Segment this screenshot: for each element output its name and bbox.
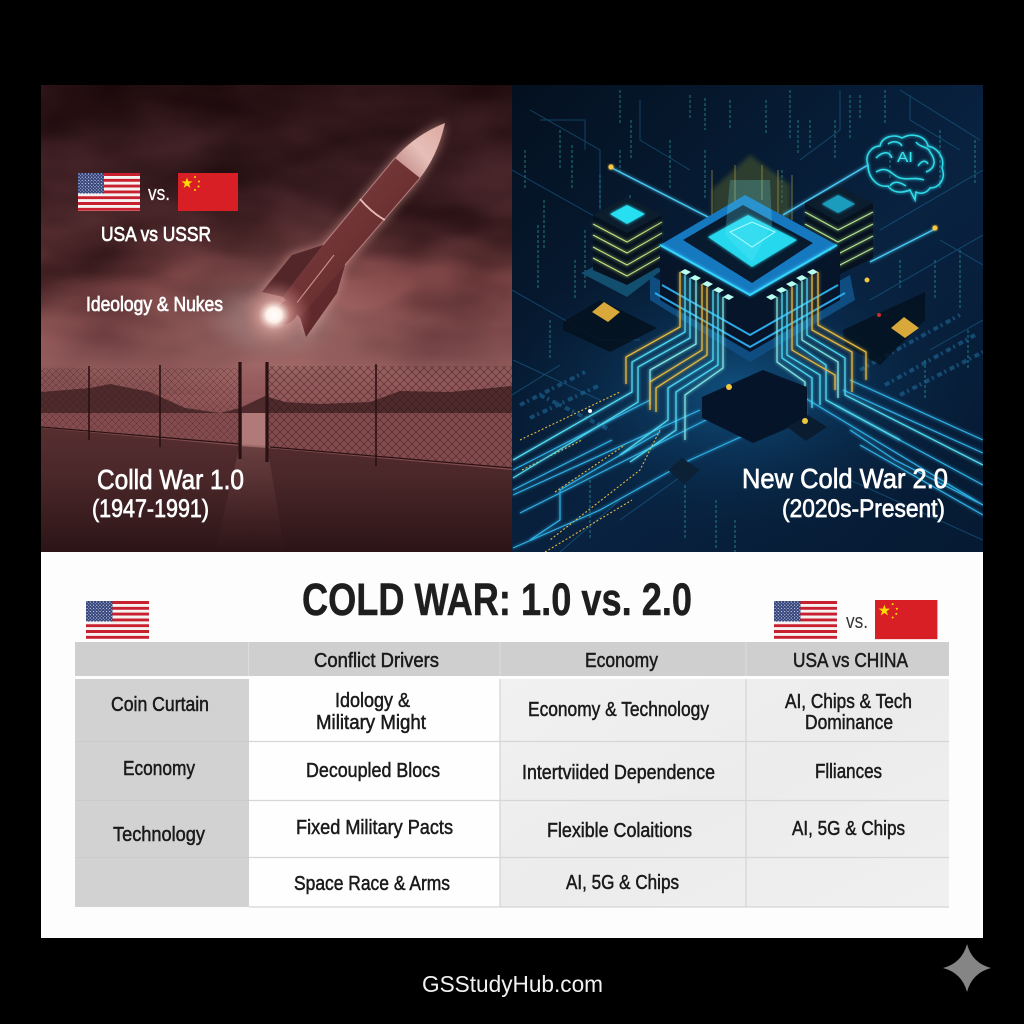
beam lines to chip — [610, 165, 935, 262]
column: USA vs China: AI, 5G & Chips — [792, 818, 905, 840]
heading: New Cold War 2.0: New Cold War 2.0 — [742, 463, 948, 494]
flag: China right — [875, 600, 937, 639]
table header — [75, 642, 949, 676]
column: USA vs China: AI, Chips & Tech — [785, 691, 912, 713]
chain link fence — [41, 362, 512, 468]
comparison table — [75, 642, 949, 907]
title: COLD WAR: 1.0 vs. 2.0 — [302, 574, 692, 625]
main diagonals — [513, 380, 983, 548]
row labels: Technology — [113, 824, 205, 846]
column: economy — [522, 699, 715, 894]
column: conflict drivers: Idology & — [335, 690, 411, 712]
dark circuit blocks — [668, 370, 827, 484]
table header: USA vs CHINA — [793, 650, 909, 672]
label: vs.: vs. — [846, 611, 868, 633]
row labels: Coin Curtain — [111, 694, 209, 716]
panel: Cold War 1.0 — [41, 85, 512, 552]
column: conflict drivers: Space Race & Arms — [294, 873, 450, 895]
gold chips — [592, 302, 919, 338]
column: conflict drivers: Decoupled Blocs — [306, 760, 440, 782]
server stack right — [805, 186, 873, 275]
flag: China — [178, 173, 238, 211]
icon: sparkle — [943, 944, 991, 992]
column: conflict drivers: Fixed Military Pacts — [296, 817, 453, 839]
gold dotted traces — [520, 392, 660, 552]
table cell backgrounds — [75, 679, 949, 907]
subheading: 1947-1991: (1947-1991) — [92, 495, 209, 523]
faint circuit lines — [512, 90, 983, 552]
column: conflict drivers: Military Might — [316, 712, 426, 734]
server stack left — [581, 197, 662, 297]
flag: USA — [78, 173, 140, 211]
table header: Economy — [585, 650, 658, 672]
circuit traces right — [777, 272, 983, 465]
row labels — [111, 694, 209, 846]
column: USA vs China: Dominance — [805, 712, 893, 734]
column: economy: AI, 5G & Chips — [566, 872, 679, 894]
distant tree line — [41, 384, 512, 414]
dark platform right — [843, 292, 925, 365]
column: USA vs China — [785, 691, 912, 840]
AI brain icon: AI — [897, 149, 913, 166]
label: USA vs USSR: USA vs USSR — [101, 224, 211, 246]
chip pins — [680, 269, 818, 300]
label: Ideology & Nukes: Ideology & Nukes — [86, 294, 223, 316]
yellow hologram — [710, 154, 792, 220]
subheading: 2020s-Present: (2020s-Present) — [782, 495, 945, 523]
central processor — [650, 180, 855, 362]
lake — [41, 413, 512, 414]
column: economy: Flexible Colaitions — [547, 820, 692, 842]
column: USA vs China: Flliances — [815, 761, 882, 783]
column: economy: Economy & Technology — [528, 699, 709, 721]
label: vs.: vs. — [148, 183, 170, 205]
table header: Conflict Drivers — [314, 650, 439, 672]
engine flame — [244, 282, 308, 343]
AI brain icon — [867, 135, 943, 200]
column: economy: Intertviided Dependence — [522, 762, 715, 784]
column: conflict drivers — [294, 690, 453, 895]
row labels: Economy — [123, 758, 195, 780]
dark platform left — [563, 300, 657, 352]
panel: New Cold War 2.0 — [495, 85, 983, 552]
panel: comparison — [41, 552, 983, 938]
circuit traces left — [513, 272, 723, 478]
circuit clutter — [520, 315, 983, 430]
heading: Cold War 1.0: Colld War 1.0 — [97, 464, 244, 495]
data rain — [525, 90, 975, 552]
footer: site name: GSStudyHub.com — [422, 971, 603, 997]
flag: USA left — [86, 601, 149, 639]
missile — [262, 123, 445, 337]
flag: USA right — [774, 601, 837, 639]
ground — [41, 428, 512, 552]
